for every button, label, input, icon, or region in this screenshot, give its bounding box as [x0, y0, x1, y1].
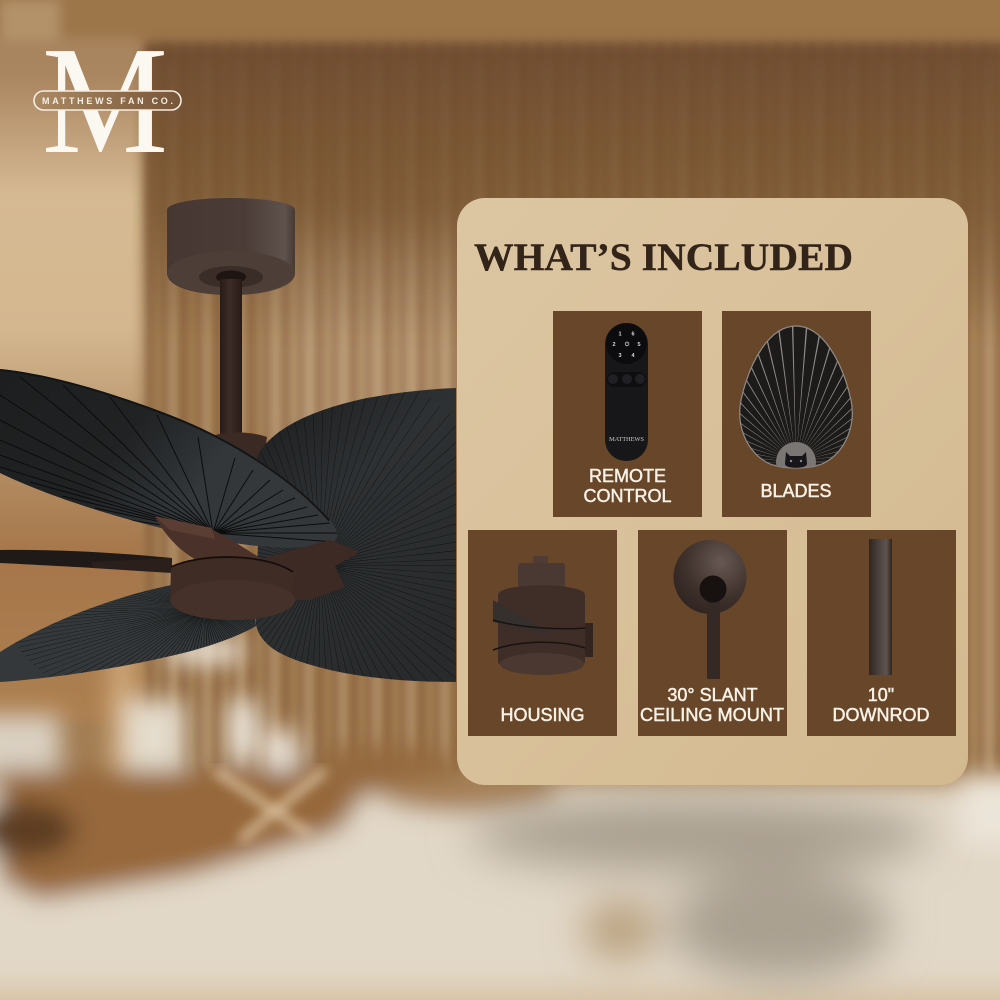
icon: remote control: 1: [618, 332, 622, 338]
fan: motor housing and blade irons: [155, 516, 360, 620]
icon: remote control: [605, 323, 648, 461]
panel: what's included: [457, 198, 968, 785]
card: downrod: [807, 530, 956, 736]
fan: rear blade: [0, 550, 172, 573]
icon: remote control: 4: [631, 353, 635, 359]
label: 30 degree slant ceiling mount: [640, 685, 784, 725]
label: remote control: CONTROL: [583, 486, 672, 506]
icon: motor housing: [493, 556, 593, 675]
logo: Matthews Fan Co.: M: [42, 16, 168, 186]
icon: downrod: [869, 539, 892, 675]
panel heading: WHAT’S INCLUDED: [474, 236, 853, 279]
fan: right blade: [256, 388, 456, 682]
icon: remote control: ⏻: [625, 341, 630, 348]
icon: remote control: 2: [612, 342, 616, 348]
icon: remote control: MATTHEWS: [609, 436, 644, 443]
label: blades: BLADES: [760, 481, 832, 501]
fan: upper left blade: [0, 369, 337, 548]
label: 10 inch downrod: DOWNROD: [832, 705, 930, 725]
card: remote control: [553, 311, 702, 517]
card: housing: [468, 530, 617, 736]
label: 30 degree slant ceiling mount: 30° SLANT: [667, 685, 758, 705]
label: remote control: REMOTE: [589, 466, 666, 486]
icon: remote control: 5: [637, 342, 641, 348]
fan: coupling cover: [213, 432, 267, 470]
label: housing: HOUSING: [500, 705, 585, 725]
ceiling fan product photo: [0, 198, 460, 690]
logo: name pill: MATTHEWS FAN CO.: [42, 96, 173, 106]
fan: downrod: [220, 279, 242, 454]
icon: slant ceiling mount: [674, 540, 746, 679]
icon: remote control: 3: [618, 353, 622, 359]
icon: blade: [739, 325, 853, 469]
card: ceiling mount: [638, 530, 787, 736]
label: 30 degree slant ceiling mount: CEILING MOUNT: [640, 705, 784, 725]
card: blades: [721, 311, 871, 537]
label: 10 inch downrod: 10": [868, 685, 894, 705]
fan: lower left blade: [0, 585, 256, 682]
fan: ceiling canopy: [167, 198, 295, 295]
icon: remote control: 6: [631, 332, 635, 338]
logo: name pill: [34, 91, 181, 110]
